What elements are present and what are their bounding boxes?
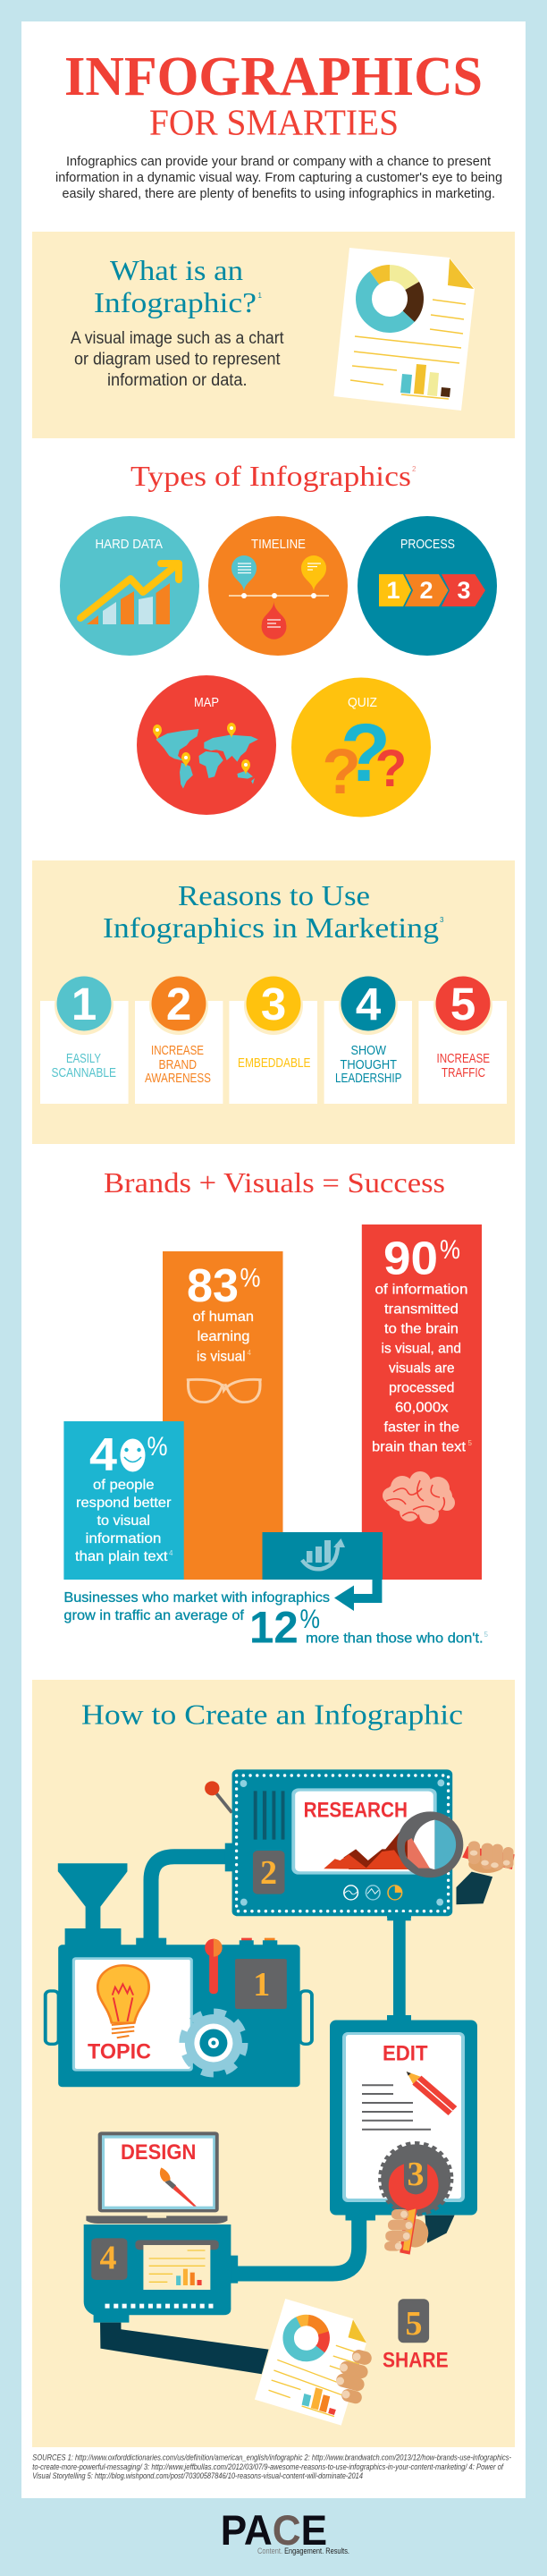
circle: map: MAP bbox=[194, 696, 219, 710]
callout: 12 percent growth: 5 bbox=[484, 1631, 488, 1639]
reason 2: INCREASE bbox=[151, 1044, 204, 1058]
heading: how to create: How to Create an Infographic bbox=[81, 1699, 463, 1731]
bar: 40 percent cyan bbox=[63, 1421, 184, 1580]
icon: document with donut chart bbox=[334, 248, 475, 411]
icon: holding fingers bbox=[334, 2348, 373, 2405]
circle: quiz: ? bbox=[341, 708, 391, 799]
icon: gear and wrench bbox=[380, 2143, 455, 2255]
heading: types of infographics: Types of Infographics bbox=[130, 460, 411, 492]
heading: what is an infographic: Infographic? bbox=[94, 286, 257, 318]
icon: paint brush bbox=[160, 2167, 197, 2207]
circle: quiz: QUIZ bbox=[348, 696, 377, 710]
reason 4: LEADERSHIP bbox=[335, 1072, 402, 1086]
definition text: A visual image such as a chart bbox=[71, 329, 284, 348]
step number 3: 3 bbox=[408, 2156, 424, 2193]
bar: 83 percent orange: % bbox=[240, 1263, 261, 1293]
circle: quiz: ? bbox=[375, 740, 407, 798]
heading: what is an infographic: What is an bbox=[110, 254, 243, 286]
intro text: Infographics can provide your brand or company with a chance to present bbox=[66, 155, 491, 169]
reason 2: AWARENESS bbox=[145, 1072, 211, 1086]
icon: funnel bbox=[58, 1863, 127, 1945]
step 4: design laptop and printer bbox=[84, 2131, 238, 2323]
bar: 40 percent cyan: 4 bbox=[89, 1429, 117, 1481]
step 2: research machine bbox=[205, 1769, 452, 1920]
icon: light bulb bbox=[97, 1965, 149, 2038]
definition text: or diagram used to represent bbox=[74, 351, 281, 369]
bar: 90 percent red: 5 bbox=[468, 1439, 472, 1447]
bar: 83 percent orange: 4 bbox=[247, 1349, 252, 1357]
bar: 40 percent cyan: 4 bbox=[169, 1549, 173, 1557]
icon: pencil bbox=[407, 2072, 457, 2115]
title: FOR SMARTIES bbox=[149, 102, 399, 143]
circle: process: PROCESS bbox=[400, 538, 455, 552]
pipes connecting machines bbox=[151, 1857, 406, 2274]
bar: 90 percent red: processed bbox=[389, 1381, 454, 1395]
circle: process: 1 bbox=[386, 577, 400, 604]
step 1: topic machine bbox=[46, 1863, 312, 2087]
label: research: RESEARCH bbox=[304, 1799, 408, 1823]
label: edit: EDIT bbox=[383, 2041, 428, 2065]
heading: what is an infographic bbox=[94, 254, 263, 318]
bar: 83 percent orange: of human bbox=[193, 1309, 254, 1325]
bar: 90 percent red: faster in the bbox=[384, 1420, 459, 1435]
bar: teal block with growth icon bbox=[263, 1532, 383, 1580]
bar: 90 percent red: is visual, and bbox=[381, 1342, 461, 1356]
reason 1: 1 bbox=[72, 979, 97, 1030]
definition text: information or data. bbox=[107, 371, 247, 390]
label: research bbox=[260, 1799, 408, 1892]
circle: timeline bbox=[208, 516, 348, 656]
badge: step number 5 bbox=[398, 2299, 429, 2343]
sources: Visual Storytelling 5: http://blog.wishpond.com/post/70300587846/10-reasons-visual-content-will-dominate-2014 bbox=[32, 2471, 363, 2480]
bar: 83 percent orange bbox=[163, 1251, 282, 1580]
reason 2: 2 bbox=[166, 979, 191, 1030]
bar: 90 percent red: % bbox=[440, 1235, 460, 1265]
circle: process: 3 bbox=[457, 577, 471, 604]
step 3: edit machine bbox=[330, 1912, 477, 2255]
circle: map bbox=[137, 675, 276, 815]
bar: 90 percent red: transmitted bbox=[384, 1302, 459, 1317]
reason 1: EASILY bbox=[66, 1052, 101, 1066]
heading: reasons: Infographics in Marketing bbox=[103, 911, 439, 944]
reason 5: INCREASE bbox=[436, 1052, 490, 1066]
reason 5: 5 bbox=[450, 979, 475, 1030]
bar: 90 percent red: of information bbox=[375, 1283, 468, 1297]
logo: PACE: Content. Engagement. Results. bbox=[257, 2546, 349, 2555]
icon: brain bbox=[383, 1471, 455, 1524]
sources bbox=[32, 2453, 511, 2480]
circle: timeline: TIMELINE bbox=[251, 538, 306, 552]
bar: 90 percent red: 90 bbox=[383, 1233, 438, 1284]
callout: 12 percent growth bbox=[63, 1590, 489, 1653]
arrow: from teal block to text bbox=[334, 1580, 382, 1611]
bar: 90 percent red: 60,000x bbox=[395, 1401, 449, 1415]
reason 3: 3 bbox=[261, 979, 286, 1030]
callout: 12 percent growth: 12 bbox=[249, 1603, 299, 1653]
intro text bbox=[55, 155, 502, 201]
bar: 40 percent cyan: than plain text bbox=[75, 1549, 168, 1564]
label: share: SHARE bbox=[383, 2349, 449, 2373]
badge: step number 5: 5 bbox=[406, 2305, 422, 2343]
label: research: 2 bbox=[260, 1854, 277, 1892]
circle: quiz bbox=[291, 678, 431, 818]
panel: how to create an infographic bbox=[32, 1680, 515, 2447]
circle: hard data: HARD DATA bbox=[95, 538, 163, 552]
icon: glasses bbox=[187, 1379, 262, 1402]
heading: types of infographics: 2 bbox=[412, 465, 417, 473]
bar: 83 percent orange: learning bbox=[197, 1329, 250, 1344]
label: design: DESIGN bbox=[121, 2140, 196, 2165]
reason 4: THOUGHT bbox=[340, 1058, 397, 1072]
bar: 90 percent red bbox=[362, 1224, 482, 1580]
world map bbox=[156, 729, 258, 789]
intro text: information in a dynamic visual way. From capturing a customer's eye to being bbox=[55, 171, 502, 185]
step 5: share document in hand bbox=[100, 2299, 449, 2426]
dotted border of research machine bbox=[237, 1775, 449, 1911]
reason 4: SHOW bbox=[350, 1044, 386, 1058]
bar: 40 percent cyan: % bbox=[147, 1432, 168, 1462]
label: topic and step number 1: TOPIC bbox=[88, 2040, 151, 2064]
bar: 90 percent red: brain than text bbox=[372, 1440, 467, 1454]
intro text: easily shared, there are plenty of benefits to using infographics in marketing. bbox=[63, 187, 495, 201]
logo: PACE: PACE bbox=[221, 2506, 327, 2554]
reason 1: SCANNABLE bbox=[52, 1066, 116, 1080]
title: INFOGRAPHICS bbox=[64, 47, 483, 107]
reason 5: TRAFFIC bbox=[442, 1066, 485, 1080]
icon: rising chart bbox=[302, 1538, 345, 1569]
callout: 12 percent growth: % bbox=[300, 1605, 320, 1634]
circle: hard data bbox=[60, 516, 199, 656]
bar: 90 percent red: visuals are bbox=[389, 1361, 455, 1376]
heading: reasons: 3 bbox=[440, 916, 444, 924]
reason 3 bbox=[229, 976, 317, 1104]
bar: 40 percent cyan: respond better bbox=[76, 1496, 172, 1511]
step number 4: 4 bbox=[100, 2240, 116, 2277]
bar: 83 percent orange: is visual bbox=[197, 1349, 245, 1365]
title bbox=[64, 47, 483, 143]
icon: magnifier and hand bbox=[397, 1811, 515, 1904]
heading: reasons bbox=[103, 879, 444, 944]
reason 4: 4 bbox=[356, 979, 382, 1030]
panel: types of infographics circles bbox=[60, 516, 497, 818]
icon: gear bbox=[183, 2012, 244, 2073]
reason 2: BRAND bbox=[159, 1058, 197, 1072]
bar: 90 percent red: to the brain bbox=[384, 1322, 459, 1336]
circle: process: 2 bbox=[419, 577, 433, 604]
reason 1 bbox=[40, 976, 129, 1104]
callout: 12 percent growth: more than those who don't. bbox=[306, 1631, 484, 1646]
label: topic and step number 1 bbox=[88, 1966, 270, 2064]
heading: reasons: Reasons to Use bbox=[178, 879, 370, 911]
panel: reasons to use infographics bbox=[32, 860, 515, 1144]
callout: 12 percent growth: Businesses who market with infographics bbox=[63, 1590, 330, 1606]
icon: smiley zero bbox=[120, 1438, 145, 1472]
reason 3: EMBEDDABLE bbox=[238, 1056, 311, 1071]
label: topic and step number 1: 1 bbox=[253, 1966, 270, 2004]
callout: 12 percent growth: grow in traffic an average of bbox=[63, 1608, 245, 1623]
bar: 40 percent cyan: of people bbox=[93, 1478, 155, 1493]
circle: quiz: ? bbox=[322, 737, 361, 808]
reason 2 bbox=[135, 976, 223, 1104]
definition text bbox=[71, 329, 284, 390]
circle: process bbox=[358, 516, 497, 656]
document lines bbox=[362, 2085, 431, 2130]
bar: 40 percent cyan: information bbox=[86, 1531, 161, 1546]
heading: brands + visuals = success: Brands + Visuals = Success bbox=[104, 1166, 445, 1199]
bar: 40 percent cyan: to visual bbox=[97, 1513, 150, 1529]
reason 5 bbox=[418, 976, 507, 1104]
bar: 83 percent orange: 83 bbox=[187, 1260, 239, 1312]
heading: what is an infographic: 1 bbox=[257, 292, 263, 300]
reason 4 bbox=[324, 976, 412, 1104]
panel: what is an infographic bbox=[32, 232, 515, 438]
